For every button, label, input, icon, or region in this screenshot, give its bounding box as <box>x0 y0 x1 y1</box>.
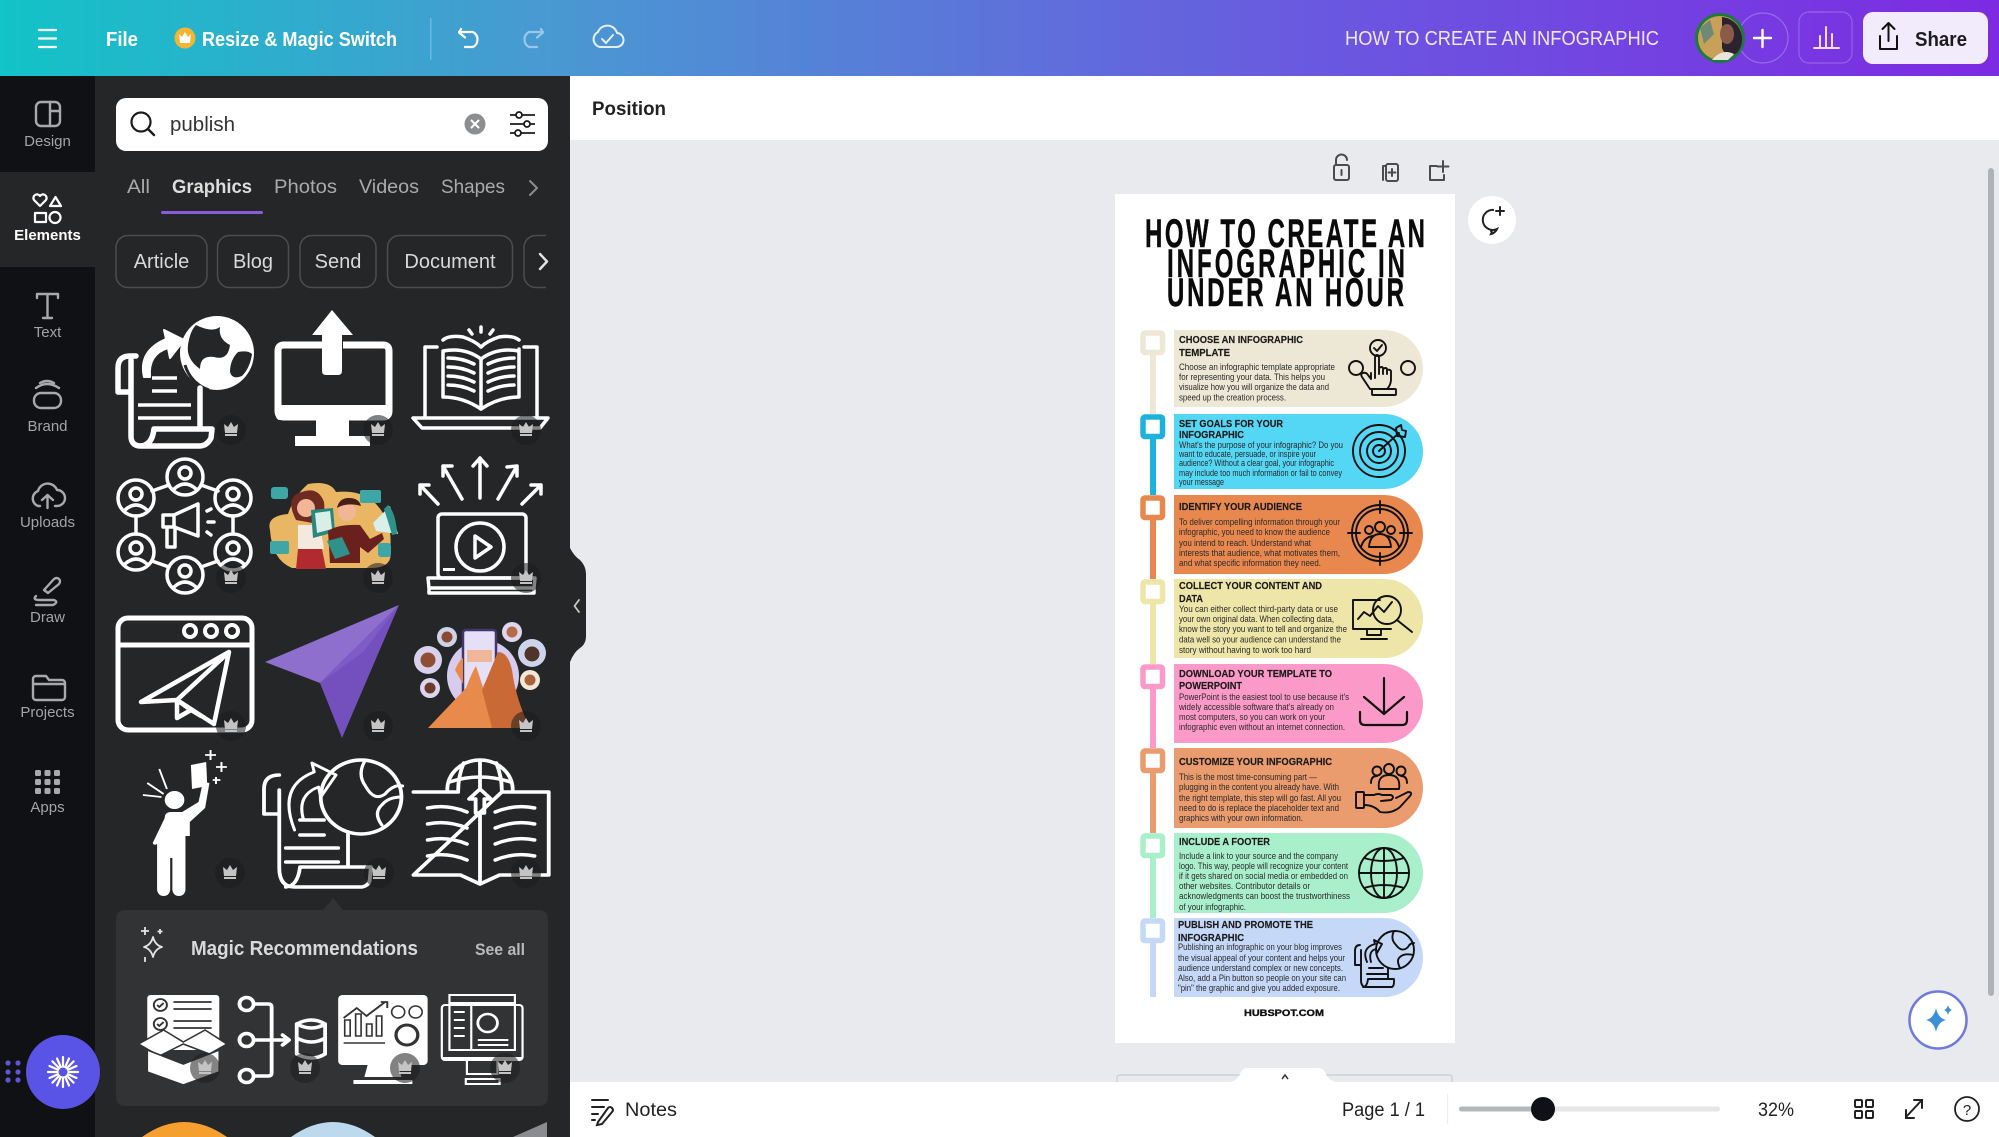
graphic: laptop broadcast <box>420 458 541 593</box>
elements side panel <box>95 76 586 1137</box>
premium crown badges <box>215 415 541 888</box>
step 3: identify audience: infographic, you need to know the audience <box>1179 527 1330 537</box>
step 1: choose template: Choose an infographic template appropriate <box>1179 362 1335 372</box>
step 4: collect content <box>1174 579 1423 658</box>
scrollbar <box>1988 168 1994 996</box>
rail item: draw: Draw <box>30 609 65 626</box>
add collaborator button <box>1738 13 1788 63</box>
step 7: footer: INCLUDE A FOOTER <box>1179 837 1271 848</box>
step 6: customize: need to do is replace the placeholder text and <box>1179 803 1339 813</box>
premium crown badges: recommendations <box>190 1053 520 1083</box>
step 1: choose template: visualize how you will organize the data and <box>1179 382 1329 392</box>
bottom status bar <box>570 1082 1999 1137</box>
step 2: set goals: audience? Without a clear goal, your infographic <box>1179 458 1334 468</box>
insights button <box>1799 12 1852 63</box>
step 7: footer: of your infographic. <box>1179 902 1246 912</box>
step 5: download template: infographic even without an internet connection. <box>1179 722 1345 732</box>
rail item: design <box>24 102 71 150</box>
step 3: identify audience: you intend to reach. Understand what <box>1179 538 1312 548</box>
tabs: Graphics <box>172 177 252 198</box>
icon: add page <box>1430 161 1448 180</box>
step 5: download template: widely accessible software that's already on <box>1178 702 1334 712</box>
tabs: Videos <box>359 177 419 198</box>
step 1: choose template: for representing your data. This helps you <box>1179 372 1325 382</box>
icon: menu <box>39 30 56 47</box>
cut-off graphics at panel bottom <box>142 1122 547 1137</box>
filter chips: Article <box>134 251 189 273</box>
icon: data analysis monitor <box>1353 596 1412 639</box>
icon: redo <box>524 29 543 47</box>
step 8: publish and promote <box>1174 918 1423 997</box>
rail item: uploads <box>20 484 75 531</box>
icon: document and globe <box>1355 931 1414 987</box>
step 8: publish and promote: the visual appeal of your content and helps your <box>1178 953 1345 963</box>
notes label: Notes <box>625 1100 677 1121</box>
rail item: projects <box>20 676 75 721</box>
rail item: projects: Projects <box>20 704 75 721</box>
step 5: download template: most computers, so you can work on your <box>1179 712 1325 722</box>
step 4: collect content: your own original data. When collecting data, <box>1179 614 1334 624</box>
share button: Share <box>1915 29 1967 51</box>
rail item: brand <box>27 381 68 435</box>
icon: target <box>1353 425 1406 477</box>
graphic: phone and community illustration <box>414 622 546 728</box>
page action icons <box>1334 154 1448 181</box>
icon: notes <box>592 1100 613 1125</box>
magic assistant button <box>1910 992 1966 1048</box>
step 7: footer: if it gets shared on social media or embedded on <box>1179 871 1348 881</box>
step 6: customize: the right template, this step will go fast. All you <box>1179 793 1341 803</box>
graphic: checklist in box <box>139 995 227 1085</box>
step 6: customize: plugging in the content you already have. With <box>1179 782 1339 792</box>
icon: download <box>1360 678 1407 725</box>
graphic: settings monitor <box>442 995 523 1084</box>
step 4: collect content: story without having to work too hard <box>1179 645 1311 655</box>
icon: undo <box>459 29 478 47</box>
step 3: identify audience: interests that audience, what motivates them, <box>1179 548 1340 558</box>
icon: globe <box>1359 848 1409 898</box>
tabs <box>127 177 537 214</box>
graphic: audience network <box>118 459 251 593</box>
step 3: identify audience: and what specific information they need. <box>1179 558 1321 568</box>
graphic: purple navigation arrow <box>265 605 399 738</box>
icon: help <box>1955 1097 1979 1121</box>
step 3: identify audience: To deliver compelling information through your <box>1179 517 1340 527</box>
step 2: set goals: may include too much information or fail to convey <box>1179 468 1342 478</box>
share button <box>1863 12 1988 64</box>
icon: clear button <box>464 114 486 134</box>
step 2: set goals: SET GOALS FOR YOUR <box>1179 419 1284 430</box>
search box: publish <box>170 114 235 136</box>
step 2: set goals: want to educate, persuade, or inspire your <box>1178 449 1316 459</box>
left icon rail <box>0 76 95 1137</box>
step 7: footer <box>1174 833 1423 913</box>
title: HOW TO CREATE AN <box>1145 211 1425 255</box>
step 2: set goals: your message <box>1179 477 1224 487</box>
see all link: See all <box>475 940 525 959</box>
icon: grid view <box>1855 1100 1873 1118</box>
comment button <box>1468 196 1516 244</box>
icon: filters <box>510 112 535 136</box>
icon: hand tapping <box>1349 340 1415 395</box>
graphic: person holding book <box>143 750 227 896</box>
step 2: set goals <box>1174 414 1423 489</box>
rail item: apps <box>30 770 65 816</box>
step 1: choose template <box>1174 330 1423 407</box>
icon: fullscreen <box>1906 1100 1922 1118</box>
graphic: marketing illustration <box>269 483 398 569</box>
top toolbar <box>0 0 1999 76</box>
step 6: customize: CUSTOMIZE YOUR INFOGRAPHIC <box>1179 757 1332 768</box>
title: INFOGRAPHIC IN <box>1167 241 1405 285</box>
step 4: collect content: know the story you want to tell and organize the <box>1179 624 1347 634</box>
rail item: brand: Brand <box>27 418 68 435</box>
icon: unlock <box>1334 154 1349 180</box>
tabs: Photos <box>274 177 337 198</box>
filter chips: Send <box>315 251 361 273</box>
graphic: data flow to database <box>239 998 325 1082</box>
step 8: publish and promote: audience understand complex or new concepts. <box>1178 963 1343 973</box>
rail item: elements: Elements <box>14 227 81 244</box>
step 8: publish and promote: Also, add a Pin button so people on your site can <box>1178 973 1346 983</box>
filter chips: Document <box>404 251 496 273</box>
canvas background <box>570 76 1999 1137</box>
step 7: footer: other websites. Contributor details or <box>1179 881 1310 891</box>
graphic: laptop open book <box>413 327 548 428</box>
icon: help: ? <box>1963 1102 1971 1119</box>
rail item: text: Text <box>34 324 62 341</box>
step 5: download template: PowerPoint is the easiest tool to use because it's <box>1179 692 1350 702</box>
step 6: customize: This is the most time-consuming part — <box>1179 772 1317 782</box>
panel collapse handle <box>570 548 586 662</box>
step 7: footer: acknowledgments can boost the trustworthiness <box>1179 891 1351 901</box>
position toolbar <box>570 76 1999 140</box>
step 3: identify audience: IDENTIFY YOUR AUDIENCE <box>1179 502 1302 513</box>
position toolbar: Position <box>592 99 666 120</box>
document title: HOW TO CREATE AN INFOGRAPHIC <box>1345 28 1659 50</box>
step 6: customize: graphics with your own information. <box>1179 813 1303 823</box>
step 4: collect content: DATA <box>1179 594 1203 605</box>
filter chips: Blog <box>233 251 273 273</box>
step 6: customize <box>1174 748 1423 828</box>
rail item: text <box>34 294 62 341</box>
tabs: Shapes <box>441 177 505 198</box>
filter chips <box>116 236 547 288</box>
step 1: choose template: CHOOSE AN INFOGRAPHIC <box>1179 335 1303 346</box>
rail item: apps: Apps <box>30 799 65 816</box>
graphic: open book with globe <box>413 760 549 884</box>
infographic page <box>1115 194 1455 1043</box>
step 4: collect content: COLLECT YOUR CONTENT AND <box>1179 581 1322 592</box>
timeline <box>1143 333 1162 997</box>
icon: cloud saved <box>594 26 624 47</box>
step 2: set goals: INFOGRAPHIC <box>1179 430 1244 441</box>
step 8: publish and promote: INFOGRAPHIC <box>1178 933 1244 944</box>
heading: magic recommendations: Magic Recommendations <box>191 938 418 960</box>
assistant launcher <box>5 1035 100 1109</box>
step 3: identify audience <box>1174 495 1423 574</box>
icon: audience crosshair <box>1348 501 1412 565</box>
step 8: publish and promote: PUBLISH AND PROMOTE THE <box>1178 920 1313 931</box>
step 7: footer: logo. This way, people will recognize your content <box>1179 861 1348 871</box>
page thumbnail tab <box>1117 1068 1452 1082</box>
search box <box>116 98 548 151</box>
tabs: All <box>127 177 150 198</box>
avatar <box>1695 13 1745 63</box>
rail item: draw <box>30 578 65 626</box>
zoom level: 32% <box>1758 1100 1794 1121</box>
step 5: download template <box>1174 664 1423 743</box>
graphic: browser paper plane <box>118 618 252 730</box>
step 1: choose template: speed up the creation process. <box>1179 392 1286 402</box>
file menu: File <box>106 29 138 51</box>
step 7: footer: Include a link to your source and the company <box>1179 851 1339 861</box>
title: UNDER AN HOUR <box>1167 270 1404 314</box>
step 5: download template: POWERPOINT <box>1179 681 1242 692</box>
icon: premium crown badge <box>174 28 196 48</box>
zoom slider <box>1459 1097 1720 1121</box>
rail item: design: Design <box>24 133 71 150</box>
page indicator: Page 1 / 1 <box>1342 1100 1425 1121</box>
step 4: collect content: data well so your audience can understand the <box>1179 634 1341 644</box>
step 2: set goals: What's the purpose of your infographic? Do you <box>1179 440 1343 450</box>
source footer: HUBSPOT.COM <box>1244 1008 1324 1019</box>
step 8: publish and promote: Publishing an infographic on your blog improves <box>1178 942 1343 952</box>
step 1: choose template: TEMPLATE <box>1179 348 1230 359</box>
resize and magic switch: Resize & Magic Switch <box>202 29 397 51</box>
graphic: monitor upload <box>276 310 389 446</box>
rail item: elements <box>14 194 81 244</box>
graphic: document and globe outline <box>264 760 403 887</box>
rail item: uploads: Uploads <box>20 514 75 531</box>
icon: team in hand <box>1356 764 1411 812</box>
graphic: analytics monitor <box>338 995 428 1084</box>
graphic: document and globe <box>118 316 254 446</box>
step 4: collect content: You can either collect third-party data or use <box>1179 604 1338 614</box>
panel: magic recommendations <box>116 898 548 1106</box>
icon: duplicate page <box>1383 164 1398 181</box>
title <box>1145 211 1425 314</box>
step 5: download template: DOWNLOAD YOUR TEMPLATE TO <box>1179 669 1332 680</box>
step 8: publish and promote: "pin" the graphic and give you added exposure. <box>1178 983 1340 993</box>
icon: sparkles <box>141 927 162 962</box>
